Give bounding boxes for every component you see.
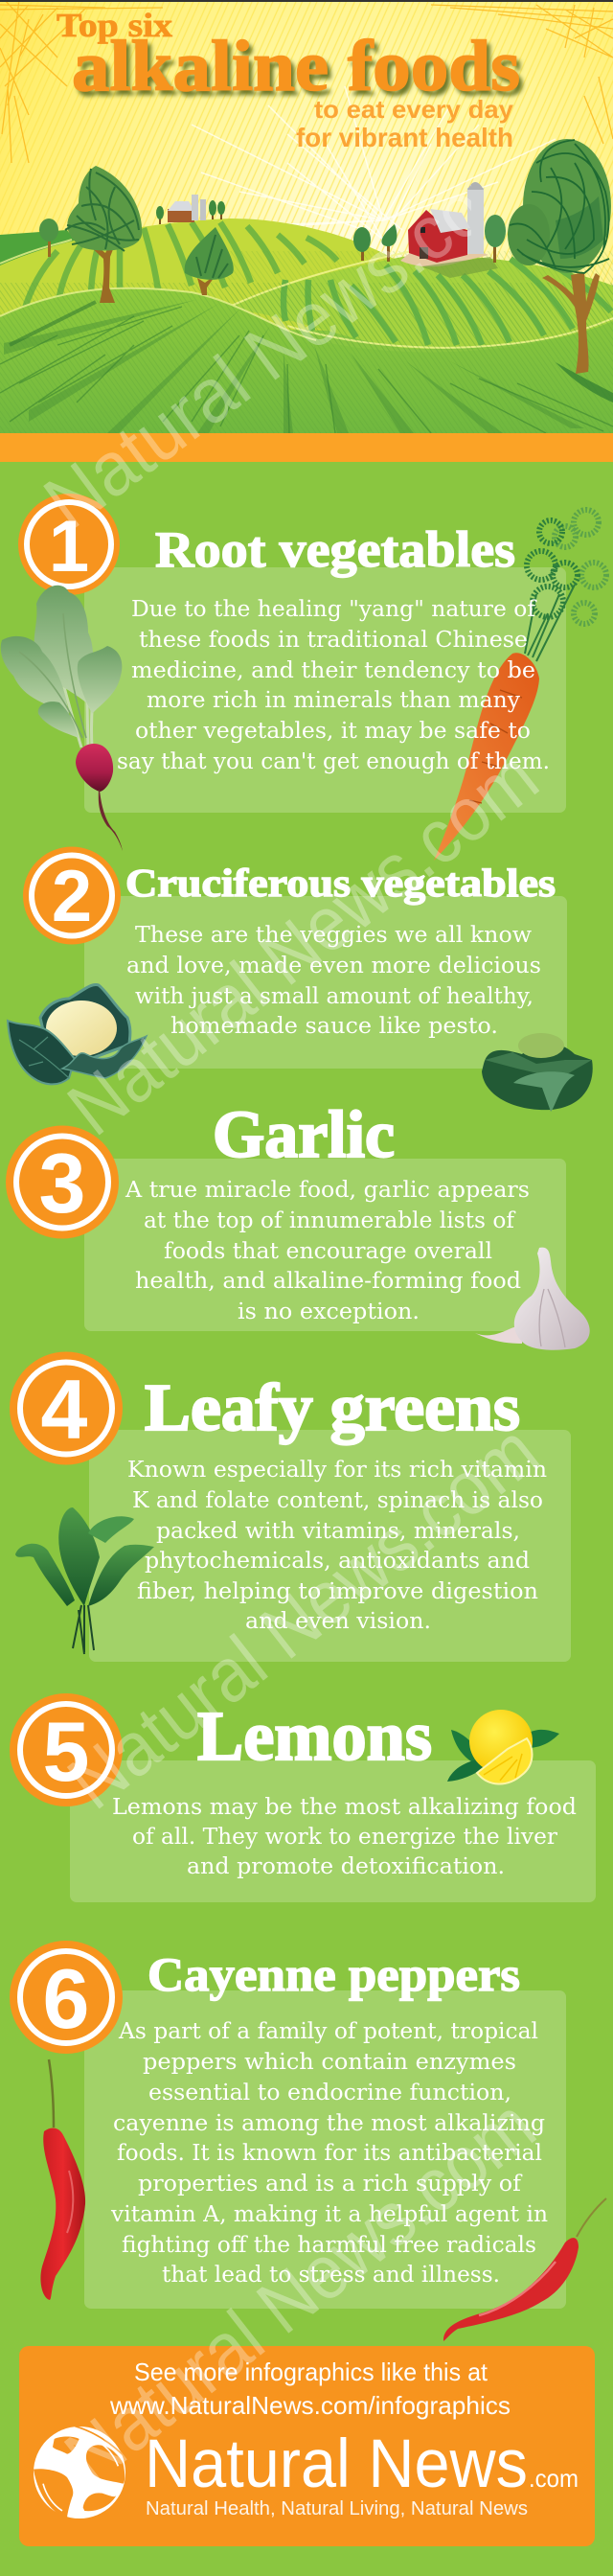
card xyxy=(84,567,566,813)
card xyxy=(84,1159,566,1331)
number badge 2: 2 xyxy=(52,856,92,937)
icon: radish xyxy=(1,586,123,851)
subtitle line 2: for vibrant health xyxy=(296,123,513,152)
body text: A true miracle food, garlic appears xyxy=(125,1178,530,1203)
card xyxy=(84,1990,566,2309)
number badge 3 xyxy=(6,1125,119,1238)
body text: say that you can't get enough of them. xyxy=(117,749,550,774)
foreground hill xyxy=(0,240,613,433)
tree: small far left xyxy=(39,218,58,257)
watermarks: Natural News.com xyxy=(29,129,548,545)
number badge 4: 4 xyxy=(41,1362,88,1457)
number badge 5: 5 xyxy=(43,1704,89,1799)
body text: medicine, and their tendency to be xyxy=(131,658,535,683)
subtitle line 1: to eat every day xyxy=(314,95,514,124)
big red barn and silo xyxy=(400,182,498,278)
body text: and love, made even more delicious xyxy=(126,954,541,978)
icon: globe logo xyxy=(34,2426,125,2518)
heading: Cayenne peppers xyxy=(148,1947,520,2001)
body text: Due to the healing "yang" nature of xyxy=(131,597,537,622)
body text: other vegetables, it may be safe to xyxy=(135,719,531,744)
link text line 2: www.NaturalNews.com/infographics xyxy=(109,2391,511,2420)
body text xyxy=(125,1178,530,1324)
body text: and even vision. xyxy=(245,1609,431,1634)
footer box xyxy=(19,2346,595,2546)
body text: these foods in traditional Chinese xyxy=(139,628,528,653)
title shadow: alkaline foods xyxy=(76,32,524,111)
title line: Top six: Top six xyxy=(57,7,173,44)
orange band xyxy=(0,433,613,462)
back left field xyxy=(0,230,96,273)
body text: These are the veggies we all know xyxy=(135,923,532,948)
heading: Lemons xyxy=(197,1697,432,1775)
panel: footer xyxy=(19,2346,595,2546)
number badge 1: 1 xyxy=(49,506,89,587)
panel: leafy greens xyxy=(10,1351,571,1662)
number badge 6: 6 xyxy=(43,1951,89,2046)
heading: Root vegetables xyxy=(155,522,515,578)
body text: packed with vitamins, minerals, xyxy=(156,1519,520,1544)
body text xyxy=(110,2019,548,2288)
logo .com: .com xyxy=(529,2464,579,2493)
far barn and silos xyxy=(168,195,206,222)
middle right striped hill xyxy=(225,251,613,356)
body text: cayenne is among the most alkalizing xyxy=(113,2111,545,2136)
number badge 6 xyxy=(10,1941,123,2054)
body text: that lead to stress and illness. xyxy=(162,2263,500,2288)
panel: cruciferous vegetables xyxy=(8,847,593,1112)
panel: cayenne peppers xyxy=(10,1941,606,2341)
watermarks: Natural News.com xyxy=(53,734,554,1151)
panel: garlic xyxy=(6,1098,590,1350)
watermarks: Natural News.com xyxy=(50,2082,551,2499)
logo tagline: Natural Health, Natural Living, Natural News xyxy=(146,2498,528,2519)
body text: properties and is a rich supply of xyxy=(138,2172,523,2196)
header illustration: farm landscape xyxy=(0,0,613,433)
body text: more rich in minerals than many xyxy=(147,688,520,713)
small trees by barn xyxy=(353,215,506,263)
icon: cabbage xyxy=(482,1033,593,1112)
body text: health, and alkaline-forming food xyxy=(135,1269,521,1294)
icon: carrot xyxy=(434,510,606,861)
body text: fighting off the harmful free radicals xyxy=(122,2233,536,2258)
body text: As part of a family of potent, tropical xyxy=(118,2019,538,2044)
icon: garlic xyxy=(475,1248,590,1350)
number badge 3: 3 xyxy=(39,1136,85,1230)
body text: at the top of innumerable lists of xyxy=(144,1208,515,1233)
body text: phytochemicals, antioxidants and xyxy=(145,1549,530,1574)
panel: lemons xyxy=(10,1693,596,1902)
body text: is no exception. xyxy=(238,1300,420,1324)
middle left striped hill xyxy=(0,218,402,331)
body text: peppers which contain enzymes xyxy=(143,2050,516,2075)
link text line 1: See more infographics like this at xyxy=(134,2358,488,2386)
heading: Cruciferous vegetables xyxy=(125,861,556,905)
body text: and promote detoxification. xyxy=(187,1854,505,1879)
tree: centre xyxy=(185,227,234,295)
sky xyxy=(0,0,613,297)
body text: foods that encourage overall xyxy=(164,1239,492,1264)
body text xyxy=(112,1795,577,1879)
card xyxy=(89,1430,571,1662)
icon: cauliflower xyxy=(8,984,147,1084)
watermarks: Natural News.com xyxy=(53,1408,554,1825)
title line: alkaline foods: alkaline foods xyxy=(72,27,520,106)
tree: big left xyxy=(65,166,142,303)
body text: homemade sauce like pesto. xyxy=(170,1014,498,1039)
icon: left chili xyxy=(40,2059,85,2300)
body text: essential to endocrine function, xyxy=(148,2081,511,2105)
logo wordmark: Natural News xyxy=(145,2426,528,2502)
body text: K and folate content, spinach is also xyxy=(132,1488,543,1513)
body text: vitamin A, making it a helpful agent in xyxy=(110,2202,548,2227)
body text xyxy=(117,597,550,774)
body text: of all. They work to energize the liver xyxy=(132,1825,557,1850)
panel: root vegetables xyxy=(1,494,606,861)
body text: foods. It is known for its antibacterial xyxy=(117,2141,542,2166)
body text xyxy=(126,923,541,1039)
body text: with just a small amount of healthy, xyxy=(135,984,534,1009)
title xyxy=(57,7,524,152)
tree: big right xyxy=(508,139,611,374)
icon: lemon xyxy=(447,1710,559,1784)
icon: right chili xyxy=(443,2198,606,2341)
number badge 5 xyxy=(10,1693,123,1806)
number badge 1 xyxy=(18,494,120,595)
card xyxy=(70,1760,596,1902)
body text: Known especially for its rich vitamin xyxy=(127,1458,547,1483)
icon: spinach xyxy=(15,1507,154,1654)
number badge 4 xyxy=(10,1351,123,1464)
body text: fiber, helping to improve digestion xyxy=(137,1579,538,1604)
number badge 2 xyxy=(23,847,121,945)
body text xyxy=(127,1458,547,1634)
heading: Leafy greens xyxy=(145,1371,520,1445)
small far trees xyxy=(156,200,225,224)
body text: Lemons may be the most alkalizing food xyxy=(112,1795,577,1820)
watermarks xyxy=(29,129,554,2499)
card xyxy=(84,896,567,1069)
heading: Garlic xyxy=(213,1098,395,1172)
